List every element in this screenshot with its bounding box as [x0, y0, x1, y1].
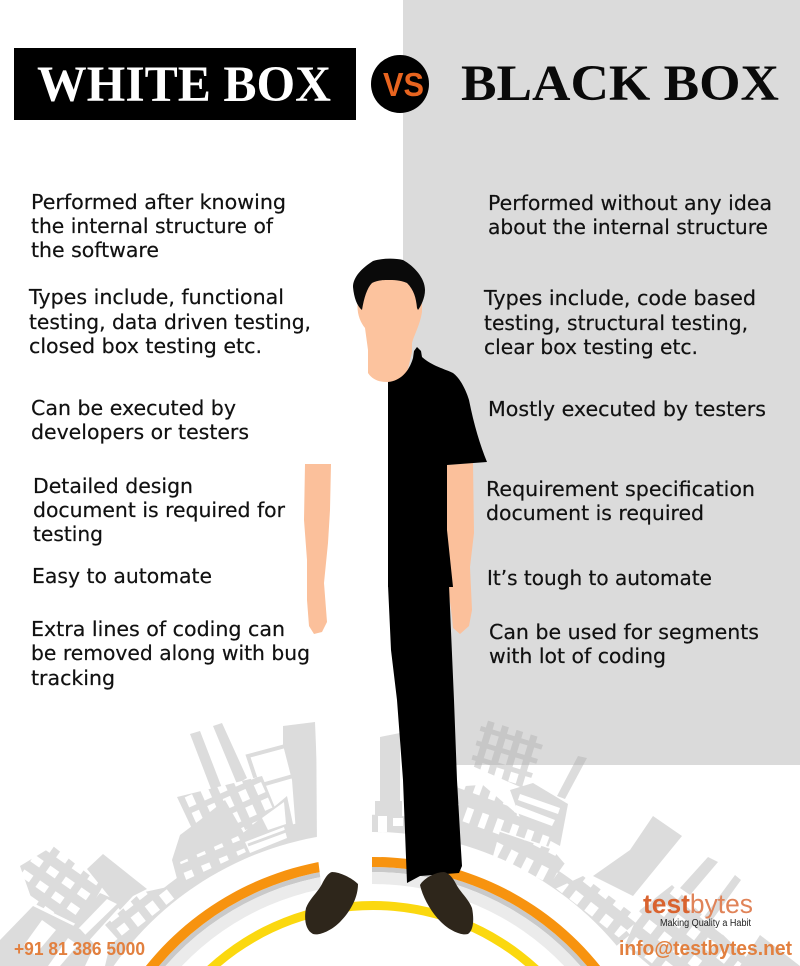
heading: white box: WHITE BOX: [37, 57, 331, 113]
text block: black box segments: with lot of coding: [489, 644, 666, 668]
left shoe: [305, 872, 358, 934]
text block: white box design document: [33, 474, 286, 546]
text block: white box executed by: [31, 396, 249, 444]
text block: black box requirement document: Requirement specification: [486, 477, 755, 501]
left arm: [304, 464, 331, 634]
badge: vs: VS: [383, 66, 424, 103]
text block: black box segments: Can be used for segments: [489, 620, 759, 644]
panel overlap tint: [403, 700, 800, 765]
city skyline illustration: [0, 719, 800, 966]
text block: black box types: testing, structural testing,: [484, 311, 748, 335]
text block: white box extra lines: Extra lines of coding can: [31, 617, 285, 641]
logo: testbytes: testbytes: [643, 889, 753, 919]
figure: person half white half black: [304, 259, 487, 934]
text block: black box types: clear box testing etc.: [484, 335, 698, 359]
text block: black box requirement document: document is required: [486, 501, 704, 525]
text block: white box types: closed box testing etc.: [29, 334, 262, 358]
text block: white box internal structure: the software: [31, 238, 159, 262]
text block: black box segments: [489, 620, 759, 668]
heading: black box: BLACK BOX: [461, 56, 779, 112]
text block: white box extra lines: tracking: [31, 666, 115, 690]
text block: white box internal structure: the internal structure of: [31, 214, 274, 238]
text block: black box internal structure: about the internal structure: [488, 215, 768, 239]
panel: grey black box background: [403, 0, 800, 765]
rainbow arcs: [146, 857, 600, 966]
text block: black box automation: It’s tough to automate: [487, 566, 712, 590]
text block: black box executed by: Mostly executed by testers: [488, 397, 766, 421]
text block: white box design document: testing: [33, 522, 103, 546]
text block: black box types: [483, 286, 756, 359]
text block: white box extra lines: be removed along with bug: [31, 641, 310, 665]
logo: testbytes: Making Quality a Habit: [660, 918, 751, 929]
text block: white box design document: Detailed design: [33, 474, 193, 498]
text block: white box internal structure: Performed after knowing: [31, 190, 286, 214]
hair: [353, 259, 425, 310]
contact: email: info@testbytes.net: [619, 938, 792, 960]
text block: white box executed by: Can be executed by: [31, 396, 236, 420]
text block: black box internal structure: Performed without any idea: [488, 191, 772, 215]
text block: white box types: Types include, functional: [28, 285, 284, 309]
text block: white box types: [28, 285, 311, 358]
text block: white box types: testing, data driven testing,: [29, 310, 311, 334]
text block: white box automation: Easy to automate: [32, 564, 212, 588]
text block: black box internal structure: [488, 191, 772, 239]
figure: white left half mask: [316, 590, 388, 892]
neck and face: [357, 278, 422, 382]
heading: white box: [14, 48, 356, 120]
right arm: [447, 463, 474, 634]
right shoe: [420, 872, 473, 934]
text block: black box requirement document: [486, 477, 755, 525]
badge: vs: [371, 55, 429, 113]
text block: white box executed by: developers or testers: [31, 420, 249, 444]
black shirt: [388, 347, 487, 587]
black trousers: [388, 585, 462, 883]
text block: white box extra lines: [31, 617, 310, 690]
text block: white box internal structure: [31, 190, 286, 262]
text block: black box types: Types include, code based: [483, 286, 756, 310]
text block: white box design document: document is required for: [33, 498, 286, 522]
contact: phone: +91 81 386 5000: [14, 939, 145, 959]
